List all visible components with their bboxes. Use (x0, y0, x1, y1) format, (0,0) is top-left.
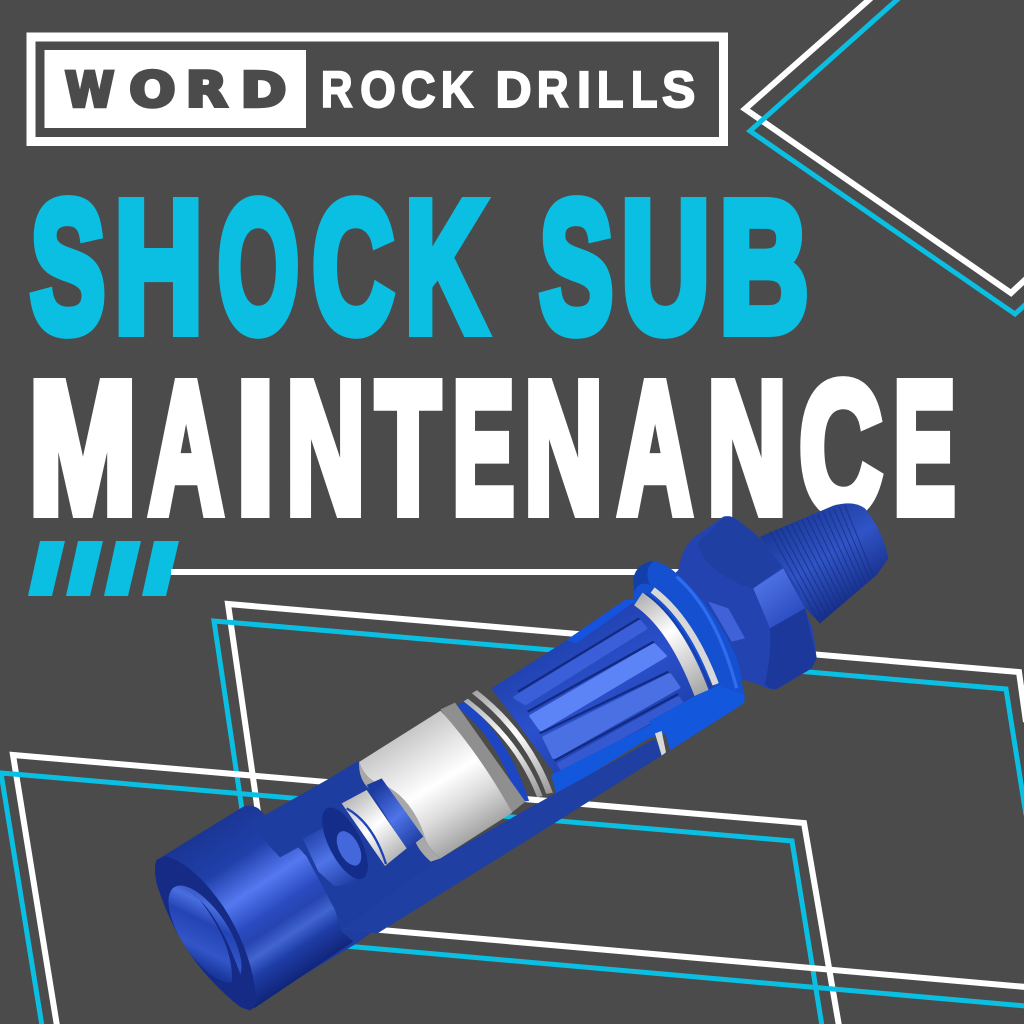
tube behind sleeve (367, 778, 423, 850)
logo text: rock drills: I (577, 61, 591, 118)
bore opening (155, 874, 255, 994)
decorative outline: bottom cyan line (345, 946, 1024, 1006)
logo text: rock drills: R (537, 61, 569, 118)
title: maintenance: N (286, 345, 365, 552)
title: maintenance: N (707, 345, 786, 552)
thread grooves (770, 505, 874, 623)
silver seal rings in center (460, 692, 550, 802)
logo text: rock drills: K (441, 61, 473, 118)
decorative outline: middle cyan frame (214, 621, 1024, 850)
bright strip under splines (551, 690, 739, 795)
small piston (303, 778, 423, 887)
nut top facet (698, 517, 782, 588)
large white bearing sleeve (359, 703, 525, 862)
nut light facet (753, 568, 805, 628)
logo text: rock drills: R (321, 61, 353, 118)
title: shock sub: C (312, 164, 394, 371)
logo text: rock drills: C (401, 61, 436, 118)
decorative outline: top right cyan chevron (750, 0, 1024, 314)
logo text: rock drills: S (662, 61, 695, 118)
bore inner shadow (182, 887, 240, 984)
text: E (894, 345, 955, 552)
logo text: rock drills: L (597, 61, 624, 118)
logo: Word Rock Drills (31, 37, 724, 142)
piston bore (313, 801, 377, 886)
silver piston sleeve (342, 790, 407, 866)
decorative outline: bottom white line (370, 929, 1024, 987)
title: maintenance: A (149, 345, 223, 552)
splined shaft (491, 600, 719, 777)
title: shock sub: H (114, 164, 203, 371)
accent slanted bars (28, 541, 179, 596)
title: shock sub: K (405, 164, 486, 371)
decorative outline: lower cyan frame (1, 773, 822, 1024)
silver seal rings near flange (638, 590, 716, 693)
piston bore highlight (332, 827, 366, 870)
accent divider line (171, 569, 691, 575)
dark wall (341, 739, 667, 933)
upper bright wall with retaining clip (648, 686, 745, 756)
nut collar highlight (708, 602, 745, 642)
piston ring groove (347, 808, 386, 864)
thread body (760, 503, 888, 623)
title: maintenance: E (452, 345, 514, 552)
lower wall of body (341, 690, 739, 933)
logo word mark: O (129, 62, 176, 118)
front cylinder (155, 806, 353, 1011)
logo word mark: W (65, 62, 114, 118)
flange disc (633, 561, 745, 702)
title: maintenance: A (618, 345, 692, 552)
title: shock sub: S (540, 164, 613, 371)
decorative outline: middle white frame (228, 604, 1024, 840)
title: maintenance: M (29, 345, 136, 552)
logo text: rock drills: D (496, 61, 532, 118)
decorative outline: lower white frame (13, 755, 839, 1024)
title: maintenance: I (236, 345, 274, 552)
tube in front of piston (303, 827, 358, 887)
lower body cavity (217, 761, 450, 1003)
logo white box (44, 50, 306, 128)
title: maintenance: C (799, 345, 882, 552)
decorative outline: top right white chevron (745, 0, 1024, 293)
title: shock sub: S (30, 164, 105, 371)
title: shock sub: U (621, 164, 710, 371)
title: maintenance: N (524, 345, 603, 552)
title: maintenance: T (376, 345, 440, 552)
threaded end and hex nut (673, 503, 888, 689)
logo word mark: R (186, 62, 227, 118)
logo word mark: D (240, 62, 286, 118)
end face (155, 856, 257, 1011)
logo frame (31, 37, 724, 142)
nut silhouette (673, 516, 817, 689)
logo text: rock drills: O (360, 61, 396, 118)
title: shock sub: B (719, 164, 809, 371)
logo text: rock drills: L (631, 61, 658, 118)
title: shock sub: O (218, 164, 299, 371)
illustration: shock sub cutaway (155, 503, 888, 1011)
nut lower facet (765, 608, 817, 689)
